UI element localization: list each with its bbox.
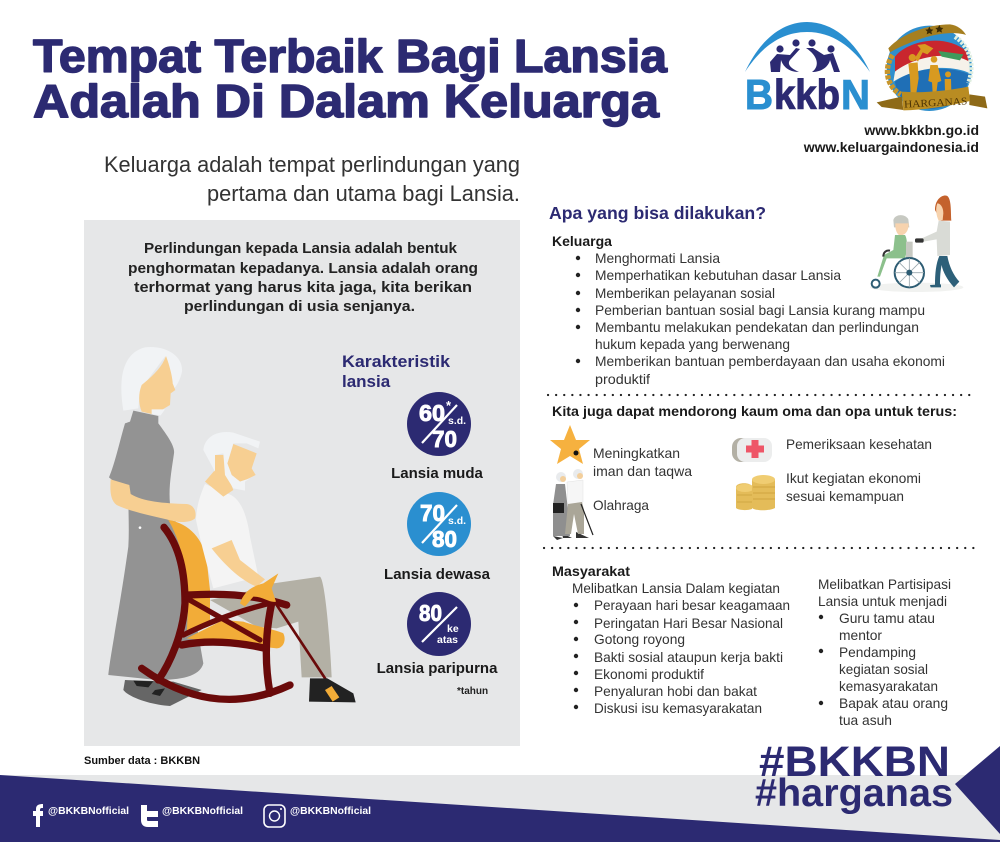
section: Masyarakat, partisipasi: kegiatan sosial [839, 661, 928, 677]
section: Masyarakat, partisipasi [818, 576, 951, 728]
badge: 80 and above [407, 592, 471, 656]
section: Masyarakat, partisipasi: Melibatkan Partisipasi [818, 576, 951, 592]
heading: Karakteristik lansia [342, 352, 451, 391]
section: Masyarakat, kegiatan: Gotong royong [594, 631, 685, 647]
badge: 60 to 70: 60 [419, 400, 445, 426]
badge: 70 to 80 [407, 492, 471, 556]
section: Keluarga: Menghormati Lansia [595, 250, 720, 266]
label: Lansia muda: Lansia muda [391, 465, 483, 482]
panel intro text: terhormat yang harus kita jaga, kita berikan [134, 280, 472, 296]
section: Masyarakat, partisipasi: Lansia untuk menjadi [818, 593, 947, 609]
website links [803, 122, 979, 155]
hashtags: #BKKBN [759, 738, 950, 786]
section: Masyarakat, kegiatan: Melibatkan Lansia Dalam kegiatan [572, 580, 780, 596]
footnote: tahun: *tahun [457, 686, 488, 697]
social: Instagram: @BKKBNofficial [290, 805, 371, 817]
badge: 80 and above: 80 [419, 600, 442, 626]
icon: medical cross [732, 438, 772, 462]
heading: Apa yang bisa dilakukan: Apa yang bisa dilakukan? [549, 203, 766, 223]
section: Keluarga: Pemberian bantuan sosial bagi Lansia kurang mampu [595, 302, 925, 318]
logo: BKKBN [745, 22, 870, 118]
icon: gold coins [736, 475, 775, 510]
badge: 70 to 80: s.d. [448, 515, 466, 527]
item: Ikut kegiatan ekonomi [786, 470, 921, 504]
section: Masyarakat, partisipasi: kemasyarakatan [839, 678, 938, 694]
section: Keluarga: Keluarga [552, 233, 612, 249]
section: Keluarga: produktif [595, 371, 650, 387]
section: Masyarakat, kegiatan: Masyarakat [552, 563, 630, 579]
section: Masyarakat, partisipasi: tua asuh [839, 712, 892, 728]
section: Masyarakat, kegiatan: Diskusi isu kemasyarakatan [594, 700, 762, 716]
section: Keluarga: Membantu melakukan pendekatan dan perlindungan [595, 319, 919, 335]
title: Tempat Terbaik Bagi Lansia [33, 30, 667, 82]
item: Meningkatkan iman dan taqwa: iman dan taqwa [593, 463, 692, 479]
icon: nurse pushing wheelchair [870, 196, 963, 292]
social: Facebook [33, 804, 129, 827]
section: Keluarga: Memberikan bantuan pemberdayaan dan usaha ekonomi [595, 353, 945, 369]
item: Ikut kegiatan ekonomi: Ikut kegiatan ekonomi [786, 470, 921, 486]
section: Keluarga: Memberikan pelayanan sosial [595, 285, 775, 301]
logo: BKKBN: B [745, 71, 773, 118]
label: Lansia paripurna: Lansia paripurna [377, 660, 498, 677]
website links: www.keluargaindonesia.id [803, 139, 979, 155]
section: Masyarakat, partisipasi: mentor [839, 627, 882, 643]
icon: elderly couple walking [553, 469, 593, 540]
illustration: elderly couple with rocking chair [108, 347, 356, 706]
hashtags [755, 738, 953, 815]
section: Masyarakat, kegiatan: Ekonomi produktif [594, 666, 704, 682]
title [33, 30, 667, 127]
section: Masyarakat, kegiatan: Penyaluran hobi dan bakat [594, 683, 757, 699]
section: Masyarakat, kegiatan: Perayaan hari besar keagamaan [594, 597, 790, 613]
section: Keluarga: Memperhatikan kebutuhan dasar Lansia [595, 267, 841, 283]
item: Ikut kegiatan ekonomi: sesuai kemampuan [786, 488, 904, 504]
label: Lansia dewasa: Lansia dewasa [384, 566, 491, 583]
heading: Karakteristik lansia: Karakteristik [342, 352, 451, 371]
badge: 60 to 70: * [446, 398, 452, 413]
subtitle: Keluarga adalah tempat perlindungan yang [104, 152, 520, 177]
logo: Harganas: HARGANAS [904, 96, 968, 111]
social: Twitter [141, 805, 243, 827]
section: Masyarakat, partisipasi: Guru tamu atau [839, 610, 935, 626]
footer band [0, 746, 1000, 842]
badge: 60 to 70: 70 [432, 426, 457, 452]
badge: 60 to 70 [407, 392, 471, 456]
badge: 80 and above: ke [447, 623, 459, 635]
panel intro text: penghormatan kepadanya. Lansia adalah orang [128, 261, 478, 277]
social: Instagram [264, 805, 371, 827]
social: Twitter: @BKKBNofficial [162, 805, 243, 817]
heading: Kita juga dapat mendorong: Kita juga dapat mendorong kaum oma dan opa untuk terus: [552, 403, 957, 419]
heading: Karakteristik lansia: lansia [342, 372, 391, 391]
item: Olahraga: Olahraga [593, 497, 649, 513]
item: Meningkatkan iman dan taqwa [593, 445, 692, 479]
subtitle: pertama dan utama bagi Lansia. [207, 181, 520, 206]
section: Masyarakat, partisipasi: Pendamping [839, 644, 916, 660]
item: Meningkatkan iman dan taqwa: Meningkatkan [593, 445, 680, 461]
logo: BKKBN: kkb [774, 71, 840, 118]
source note: Sumber data : BKKBN [84, 755, 200, 767]
section: Masyarakat, kegiatan: Peringatan Hari Besar Nasional [594, 615, 783, 631]
section: Masyarakat, partisipasi: Bapak atau orang [839, 695, 948, 711]
icon: star [550, 425, 590, 464]
subtitle [104, 152, 520, 206]
badge: 80 and above: atas [437, 634, 458, 646]
panel intro text: Perlindungan kepada Lansia adalah bentuk [144, 241, 458, 257]
logo: BKKBN: N [841, 71, 870, 118]
logo: Harganas [877, 24, 987, 111]
badge: 60 to 70: s.d. [448, 415, 466, 427]
item: Pemeriksaan kesehatan: Pemeriksaan kesehatan [786, 436, 932, 452]
hashtags: #harganas [755, 772, 953, 815]
panel intro text: perlindungan di usia senjanya. [184, 299, 415, 315]
badge: 70 to 80: 70 [420, 500, 445, 526]
panel intro text [128, 241, 478, 315]
panel: grey left panel [84, 220, 520, 746]
website links: www.bkkbn.go.id [863, 122, 979, 138]
section: Keluarga [552, 233, 945, 387]
section: Masyarakat, kegiatan: Bakti sosial ataupun kerja bakti [594, 649, 783, 665]
title: Adalah Di Dalam Keluarga [33, 75, 659, 127]
badge: 70 to 80: 80 [432, 526, 457, 552]
section: Masyarakat, kegiatan [552, 563, 790, 716]
social: Facebook: @BKKBNofficial [48, 805, 129, 817]
section: Keluarga: hukum kepada yang berwenang [595, 336, 790, 352]
